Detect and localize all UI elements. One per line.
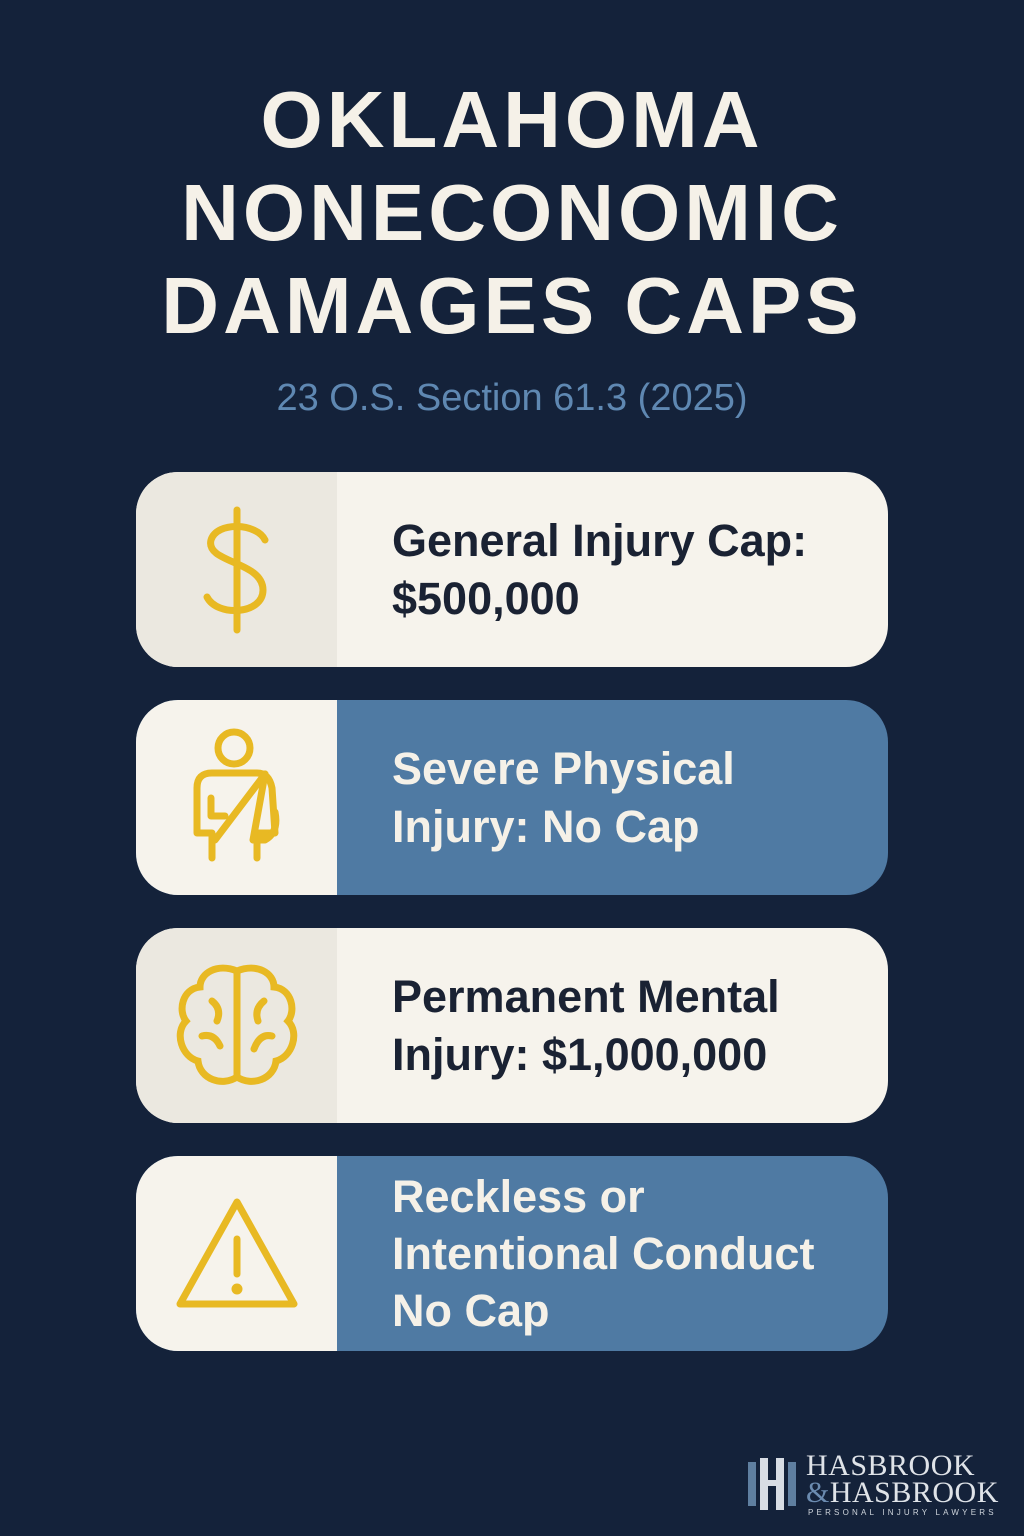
panel: permanent mental injury xyxy=(136,928,888,1123)
text: No Cap xyxy=(392,1285,550,1336)
text xyxy=(392,514,807,624)
icon: dollar xyxy=(136,472,337,667)
text: Injury: No Cap xyxy=(392,800,700,852)
title: DAMAGES CAPS xyxy=(161,261,863,350)
text: Reckless or xyxy=(392,1171,645,1222)
icon: person with sling xyxy=(136,700,337,895)
title: NONECONOMIC xyxy=(181,168,843,257)
text: $500,000 xyxy=(392,572,580,624)
panel: reckless conduct xyxy=(136,1156,888,1351)
logo: PERSONAL INJURY LAWYERS xyxy=(808,1508,997,1517)
text: Injury: $1,000,000 xyxy=(392,1028,767,1080)
text xyxy=(392,970,780,1080)
icon: warning xyxy=(136,1156,337,1351)
title xyxy=(161,75,863,350)
text: Severe Physical xyxy=(392,742,735,794)
text xyxy=(392,742,735,852)
text: Intentional Conduct xyxy=(392,1228,814,1279)
title: OKLAHOMA xyxy=(260,75,764,164)
logo: &HASBROOK xyxy=(806,1476,999,1509)
icon: brain xyxy=(136,928,337,1123)
subtitle: 23 O.S. Section 61.3 (2025) xyxy=(276,377,748,419)
panel: general injury xyxy=(136,472,888,667)
logo xyxy=(748,1449,999,1517)
logo: HASBROOK xyxy=(806,1449,975,1482)
text: Permanent Mental xyxy=(392,970,780,1022)
text: General Injury Cap: xyxy=(392,514,807,566)
text xyxy=(392,1171,814,1336)
panel: severe physical injury xyxy=(136,700,888,895)
